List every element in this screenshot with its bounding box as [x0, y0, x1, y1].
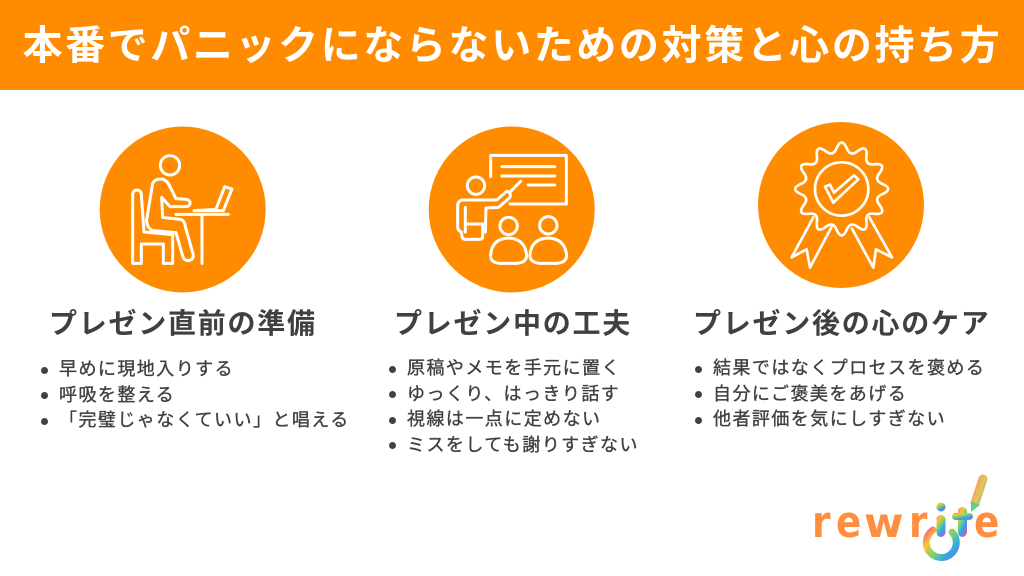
list: before: 呼吸を整える	[59, 385, 175, 405]
heading: during: プレゼン中の工夫	[394, 308, 632, 339]
logo: rewrite: r	[812, 496, 831, 548]
logo: rewrite	[812, 479, 999, 558]
list: after: 自分にご褒美をあげる	[713, 384, 907, 404]
list: during: 視線は一点に定めない	[407, 409, 602, 429]
list: during	[389, 358, 639, 455]
icon: presenter with audience	[429, 126, 595, 292]
heading: before: プレゼン直前の準備	[49, 308, 317, 339]
icon: award rosette with check	[758, 122, 924, 288]
title banner: 本番でパニックにならないための対策と心の持ち方	[22, 24, 1002, 68]
logo: rewrite: e	[836, 496, 861, 548]
logo: rewrite: r	[909, 496, 928, 548]
list: during: ゆっくり、はっきり話す	[407, 384, 620, 404]
list: during: ミスをしても謝りすぎない	[407, 435, 639, 455]
list: after: 他者評価を気にしすぎない	[713, 409, 946, 429]
list: after	[695, 358, 985, 429]
list: before	[41, 359, 350, 430]
icon: person at desk	[100, 126, 266, 292]
list: before: 「完璧じゃなくていい」と唱える	[59, 410, 350, 430]
title banner	[0, 0, 1024, 90]
list: during: 原稿やメモを手元に置く	[407, 358, 621, 378]
heading: after: プレゼン後の心のケア	[693, 308, 991, 339]
logo: rewrite: w	[864, 499, 904, 547]
logo: rewrite: e	[974, 496, 999, 548]
list: before: 早めに現地入りする	[59, 359, 234, 379]
list: after: 結果ではなくプロセスを褒める	[713, 358, 985, 378]
